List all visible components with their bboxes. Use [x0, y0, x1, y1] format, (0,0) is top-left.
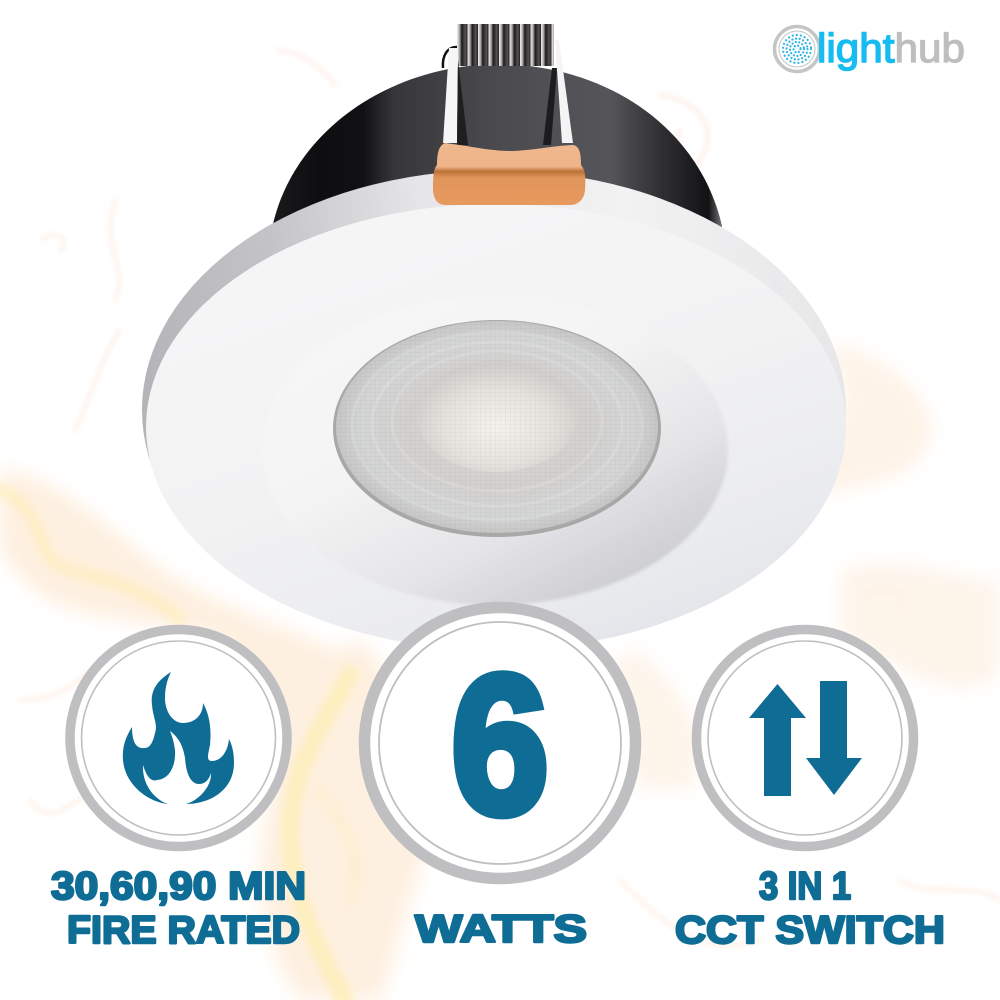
badge circle	[696, 630, 914, 846]
badge: cct switch	[675, 630, 945, 952]
orange clip	[433, 143, 585, 205]
lens	[333, 320, 661, 537]
logo: lighthub	[774, 25, 965, 72]
lens dome	[417, 360, 577, 472]
trim front face	[146, 204, 846, 650]
trim outer rim	[142, 170, 846, 650]
recess	[262, 295, 728, 605]
logo wordmark: lighthub	[817, 25, 965, 71]
label: 30,60,90 min fire rated: FIRE RATED	[67, 909, 300, 952]
label: watts: WATTS	[415, 908, 587, 951]
label: 3 in 1 cct switch	[675, 865, 945, 952]
label: 3 in 1 cct switch: CCT SWITCH	[675, 909, 945, 952]
badge: fire rated	[51, 630, 306, 952]
label: 30,60,90 min fire rated	[51, 865, 306, 952]
downlight product	[142, 24, 846, 650]
label: 30,60,90 min fire rated: 30,60,90 MIN	[51, 865, 306, 908]
badge circle	[70, 630, 287, 846]
number 6: 6	[451, 634, 549, 855]
badge circle	[364, 608, 636, 878]
icon: flame	[123, 672, 234, 804]
spring coil	[443, 24, 554, 68]
logo ring icon	[774, 26, 820, 72]
badge: 6 watts	[364, 608, 636, 951]
black housing	[273, 64, 722, 300]
label: 3 in 1 cct switch: 3 IN 1	[759, 865, 851, 908]
icon: up and down arrows	[749, 681, 862, 796]
spring clip arms	[443, 40, 573, 145]
